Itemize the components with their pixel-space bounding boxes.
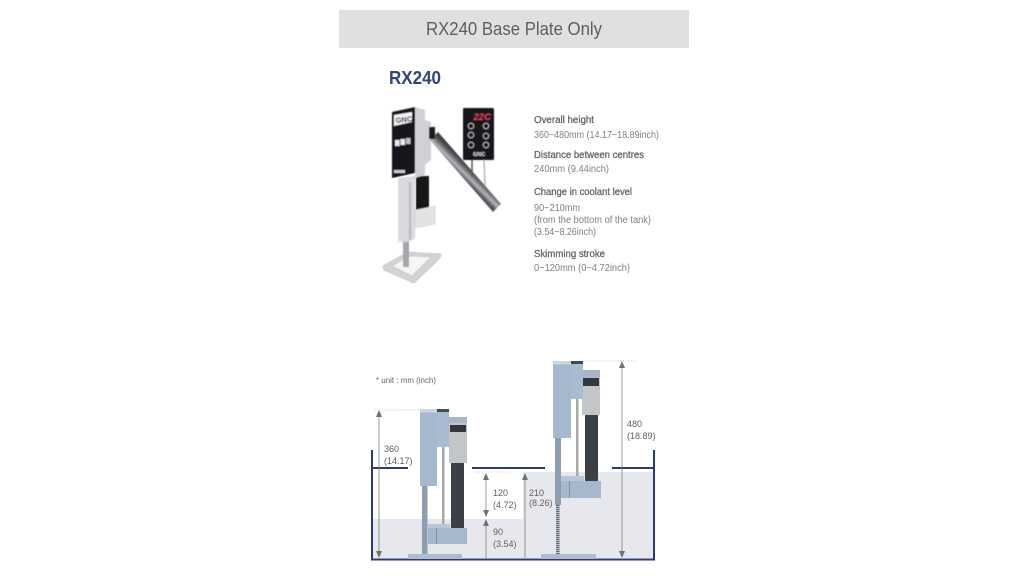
lifting rod bbox=[422, 486, 428, 554]
dimension: 480: 480 bbox=[627, 419, 642, 429]
spec: skimming stroke bbox=[534, 249, 630, 274]
coolant at low level bbox=[372, 519, 523, 558]
base plate bbox=[541, 554, 596, 559]
spec: skimming stroke: Skimming stroke bbox=[534, 249, 605, 260]
tank outline bbox=[371, 450, 654, 560]
machine at maximum height bbox=[541, 361, 601, 559]
upper housing bbox=[571, 361, 583, 399]
upper housing bbox=[437, 409, 449, 447]
dimension: 360 bbox=[376, 410, 413, 558]
dimension: 480 bbox=[619, 361, 656, 558]
dimension: 120 bbox=[483, 473, 517, 517]
spec: overall height: Overall height bbox=[534, 115, 594, 126]
dimension: 360: (14.17) bbox=[384, 456, 413, 466]
skimmer housing side bbox=[415, 107, 431, 178]
skimmer base plate bbox=[383, 252, 441, 283]
spec: change in coolant level: 90~210mm bbox=[534, 203, 580, 214]
product photo: skimmer and controller bbox=[383, 107, 501, 283]
skimmer lead screw bbox=[403, 240, 409, 267]
spec: change in coolant level: (3.54~8.26inch) bbox=[534, 227, 596, 238]
spec: distance between centres: Distance between centres bbox=[534, 150, 644, 161]
controller bbox=[463, 108, 494, 160]
dark motor column bbox=[585, 415, 598, 481]
dimension: 120: (4.72) bbox=[493, 500, 517, 510]
unit note: * unit : mm (inch) bbox=[376, 376, 436, 385]
sensor head bbox=[449, 417, 467, 463]
dimension: 90: (3.54) bbox=[493, 539, 517, 549]
dimension: 210: (8.26) bbox=[529, 498, 553, 508]
specifications text block bbox=[534, 115, 659, 274]
dimension: 90: 90 bbox=[493, 527, 503, 537]
skimmer front panel bbox=[392, 107, 415, 178]
skimmer motor column bbox=[416, 176, 429, 210]
coolant at high level bbox=[523, 472, 653, 558]
title banner bbox=[339, 10, 689, 48]
float block bbox=[428, 524, 467, 544]
skimmer front panel: GNC bbox=[395, 114, 413, 125]
float block bbox=[561, 476, 601, 498]
base plate bbox=[408, 554, 462, 559]
spec: change in coolant level: Change in coolant level bbox=[534, 187, 632, 198]
heading: model name: RX240 bbox=[389, 68, 441, 88]
dimension: 120: 120 bbox=[493, 488, 508, 498]
skimmer float box bbox=[415, 206, 435, 228]
dimension: 480: (18.89) bbox=[627, 431, 656, 441]
guide rod bbox=[442, 447, 444, 525]
dotted reference lines bbox=[375, 361, 637, 472]
controller cables bbox=[472, 158, 485, 186]
dimension: 90 bbox=[483, 519, 517, 558]
lifting rod bbox=[555, 438, 561, 505]
controller: 22C bbox=[472, 112, 491, 123]
tank diagram bbox=[371, 361, 656, 560]
dark motor column bbox=[451, 463, 464, 528]
guide rod bbox=[576, 398, 578, 476]
oil discharge pipe bbox=[429, 127, 501, 212]
main housing bbox=[420, 409, 437, 486]
main housing bbox=[553, 361, 571, 438]
spec: skimming stroke: 0~120mm (0~4.72inch) bbox=[534, 263, 630, 274]
spec: change in coolant level bbox=[534, 187, 651, 238]
spec: change in coolant level: (from the bottom of the tank) bbox=[534, 215, 651, 226]
spec: distance between centres: 240mm (9.44inch) bbox=[534, 164, 609, 175]
spec: overall height: 360~480mm (14.17~18.89inch) bbox=[534, 130, 659, 141]
title banner: RX240 Base Plate Only bbox=[426, 18, 603, 39]
spec: distance between centres bbox=[534, 150, 644, 175]
skimmer support column bbox=[398, 176, 415, 242]
dimension: 360: 360 bbox=[384, 444, 399, 454]
lead screw bbox=[556, 505, 560, 554]
dimension: 210 bbox=[522, 473, 553, 558]
controller: GNC bbox=[473, 152, 485, 158]
dimension: 210: 210 bbox=[529, 488, 544, 498]
machine at minimum height bbox=[408, 409, 467, 559]
sensor head bbox=[582, 370, 600, 415]
spec: overall height bbox=[534, 115, 659, 141]
